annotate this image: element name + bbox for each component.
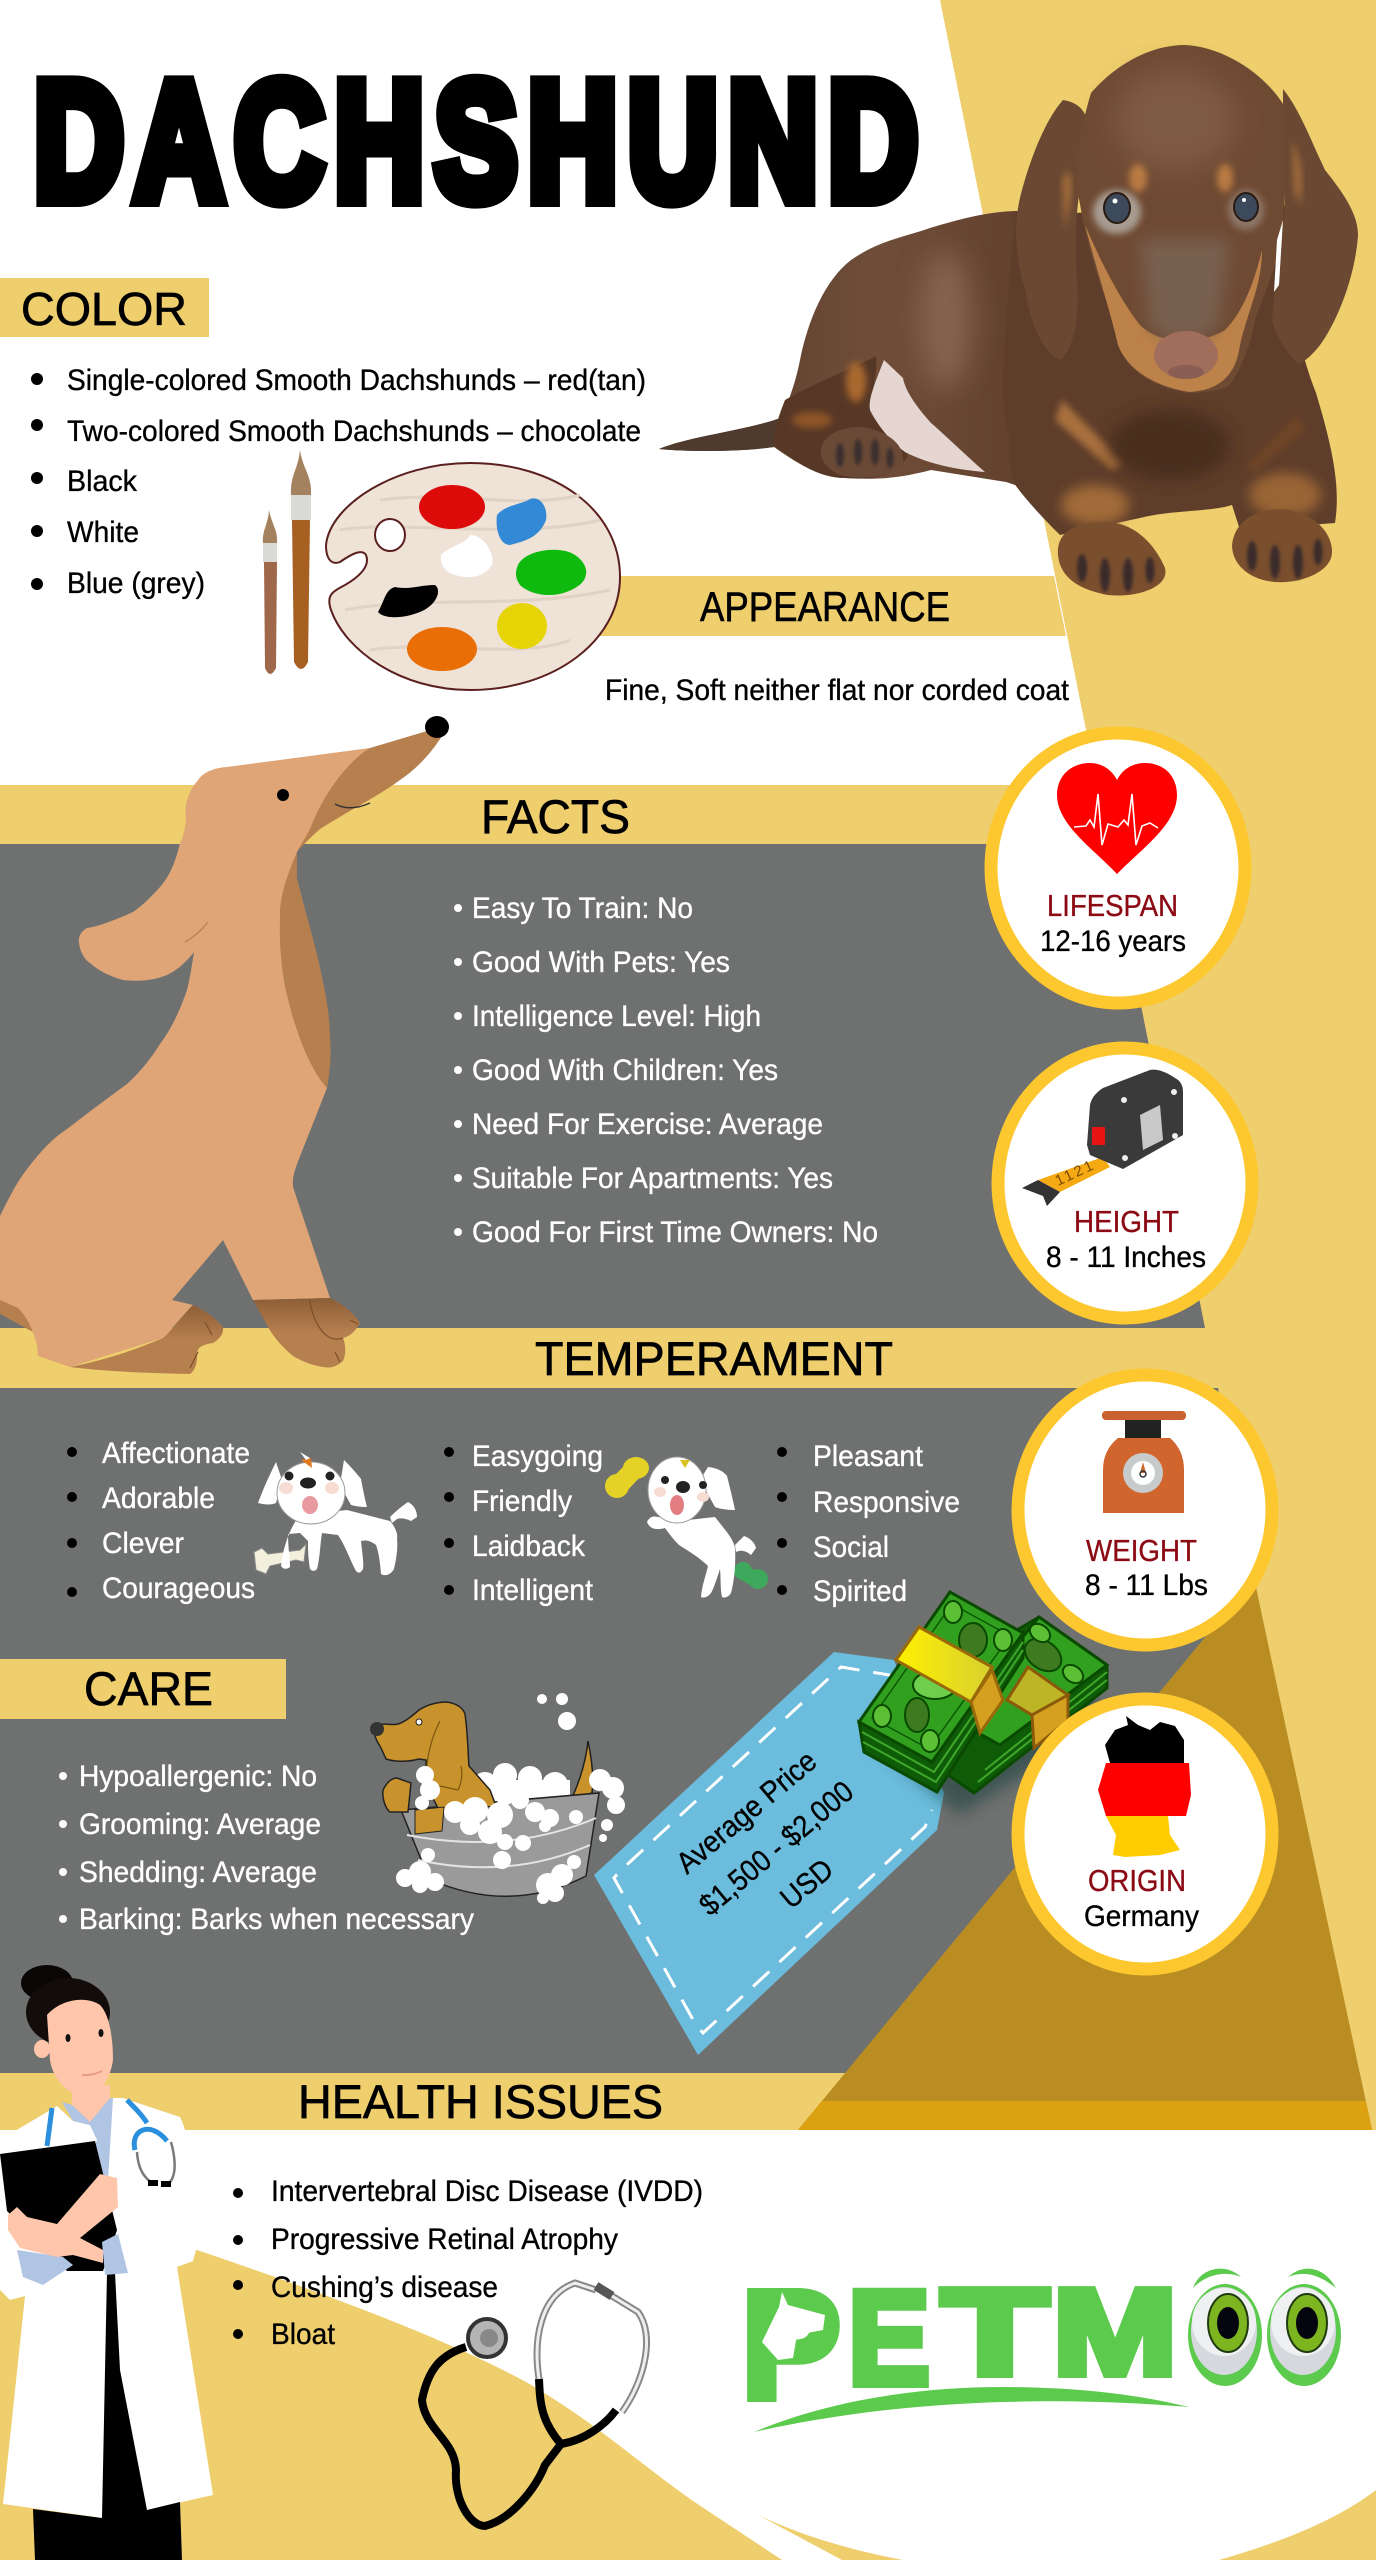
temperament list column 2: Laidback [472,1530,586,1563]
temperament list column 3: Social [813,1531,889,1564]
health issues list: Progressive Retinal Atrophy [271,2223,618,2256]
title: DACHSHUND [34,48,928,235]
health issues list: Bloat [271,2318,336,2351]
logo: petmoo: E [848,2264,930,2413]
temperament list column 1: Courageous [102,1572,255,1605]
bottom yellow sliver [758,2515,903,2560]
color list: Blue (grey) [67,567,205,600]
facts list: Easy To Train: No [472,892,693,925]
facts list: Suitable For Apartments: Yes [472,1162,833,1195]
panel: bottom white area [0,2130,1376,2560]
health issues list: Intervertebral Disc Disease (IVDD) [271,2175,703,2208]
heading: care: CARE [84,1662,213,1715]
badge: origin: ORIGIN [1088,1863,1186,1898]
care list: Shedding: Average [79,1856,317,1889]
care list: Barking: Barks when necessary [79,1903,474,1936]
care list: Grooming: Average [79,1808,321,1841]
gold band [798,2101,1372,2130]
heading: color [0,278,209,337]
appearance heading bar [590,576,1066,636]
temperament list column 3: Spirited [813,1575,907,1608]
price tag: USD [774,1853,840,1915]
badge: lifespan: LIFESPAN [1047,888,1178,923]
health issues list [233,2175,703,2351]
temperament list column 1 [67,1437,255,1605]
badge: origin: Germany [1084,1900,1199,1933]
badge: height: 8 - 11 Inches [1046,1241,1206,1274]
badge: lifespan: 12-16 years [1040,925,1186,958]
icon: tape measure [1022,1070,1183,1206]
color list [31,364,646,600]
heading: color: COLOR [21,283,187,335]
facts list: Need For Exercise: Average [472,1108,823,1141]
temperament list column 3 [777,1440,960,1608]
icon: weighing scale [1102,1411,1186,1513]
logo: petmoo: M [1053,2264,1177,2400]
icon: stethoscope [422,2283,647,2526]
temperament list column 2: Intelligent [472,1574,594,1607]
icon: white puppy with bone [254,1452,417,1575]
bottom right yellow curve [1219,2490,1376,2560]
icon: heart with pulse [1057,763,1177,874]
color list: Two-colored Smooth Dachshunds – chocolate [67,415,641,448]
heading: health issues: HEALTH ISSUES [298,2075,663,2128]
price tag: $1,500 - $2,000 [693,1775,860,1922]
gold triangle [798,1578,1372,2130]
badge: height: HEIGHT [1074,1204,1179,1239]
appearance text: Fine, Soft neither flat nor corded coat [605,674,1070,707]
price tag [594,1652,944,2055]
badge: height [998,1048,1252,1318]
puppy photo illustration [659,45,1358,596]
panel: temperament and care grey [0,1388,1254,2073]
icon: white puppy with toys [605,1457,768,1598]
temperament list column 2 [444,1440,603,1607]
temperament list column 1: Clever [102,1527,184,1560]
care list: Hypoallergenic: No [79,1760,317,1793]
facts list [454,892,878,1249]
panel: top white area [0,0,1097,785]
heading: facts: FACTS [481,790,630,843]
badge: weight [1018,1375,1272,1645]
health issues list: Cushing’s disease [271,2271,498,2304]
temperament list column 2: Friendly [472,1485,572,1518]
color list: Black [67,465,138,498]
logo: petmoo [741,2259,1341,2432]
care list [59,1760,474,1936]
badge: origin [1018,1699,1272,1969]
illustration: doctor [0,1965,213,2560]
facts list: Good With Children: Yes [472,1054,778,1087]
bottom left yellow sweep [0,2205,782,2560]
icon: germany flag map [1098,1716,1191,1857]
temperament list column 3: Pleasant [813,1440,924,1473]
icon: paint palette [326,463,620,690]
temperament list column 1: Affectionate [102,1437,250,1470]
heading: care [0,1659,286,1719]
facts list: Good With Pets: Yes [472,946,730,979]
icon: dog in bath tub [370,1693,625,1904]
heading: temperament: TEMPERAMENT [535,1332,893,1385]
icon: paint brushes [263,450,311,674]
logo: petmoo: P [741,2259,841,2431]
panel: facts grey [0,844,1205,1328]
icon: tape measure: 1121 [1053,1157,1096,1190]
facts list: Intelligence Level: High [472,1000,761,1033]
price tag: Average Price [670,1745,823,1880]
badge: weight: 8 - 11 Lbs [1085,1569,1208,1602]
temperament list column 3: Responsive [813,1486,960,1519]
icon: money stacks [859,1592,1110,1815]
badge: lifespan [991,733,1245,1003]
color list: Single-colored Smooth Dachshunds – red(tan) [67,364,646,397]
temperament list column 2: Easygoing [472,1440,603,1473]
badge: weight: WEIGHT [1086,1533,1197,1568]
facts list: Good For First Time Owners: No [472,1216,878,1249]
illustration: sitting dachshund [0,716,449,1374]
temperament list column 1: Adorable [102,1482,215,1515]
color list: White [67,516,139,549]
logo: petmoo: T [942,2264,1048,2400]
appearance heading bar: APPEARANCE [700,583,950,630]
